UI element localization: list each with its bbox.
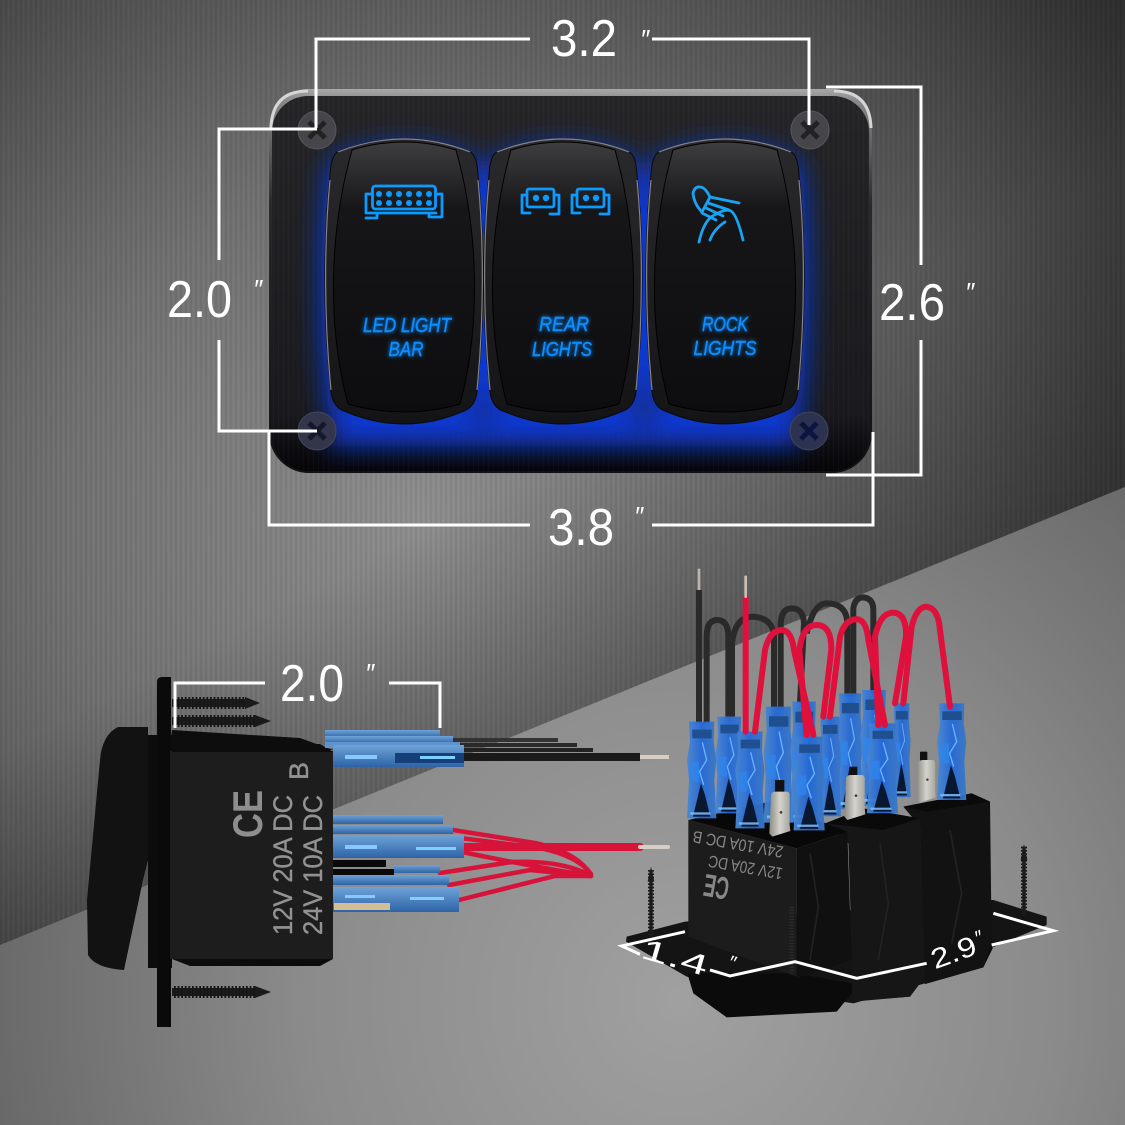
dimension: 2.9 inch: 2.9	[926, 930, 981, 975]
flange and base	[148, 677, 172, 1027]
label: ROCK LIGHTS	[694, 314, 757, 360]
icon: rock light	[693, 187, 743, 242]
red wires and loops	[746, 577, 950, 735]
blue terminals lower	[333, 865, 459, 912]
panel silver edge	[269, 89, 872, 473]
body second switch	[827, 810, 925, 1002]
dimension: panel width 3.8 inch: ″	[634, 501, 644, 531]
dimension: 2.9 inch	[926, 927, 987, 975]
back row blue connectors	[764, 690, 966, 823]
screw: bottom right	[790, 412, 828, 450]
dimension: panel height 2.6 inch	[826, 87, 975, 475]
icon: two rear work lights	[522, 189, 609, 214]
red wires	[440, 830, 668, 900]
dimension: 1.4 inch: 1.4	[637, 933, 712, 983]
body markings: 12V 20A DC	[268, 795, 298, 935]
label: REAR LIGHTS	[532, 314, 593, 361]
front blue connectors	[687, 717, 898, 830]
rocker: rock lights	[646, 139, 804, 424]
mounting screws	[172, 697, 271, 998]
dimension: panel screw width 3.2 inch	[316, 10, 809, 128]
icon: LED light bar	[366, 186, 442, 218]
screw: top right	[791, 111, 829, 149]
black wires upper	[440, 740, 669, 757]
dimension: 1.4 inch: ″	[726, 952, 739, 975]
switch body	[170, 751, 333, 959]
rocker caps underneath	[687, 937, 993, 1017]
front face markings upside down: 12V 20A DC	[707, 851, 784, 883]
screw: bottom left	[298, 412, 336, 450]
dimension: panel height 2.6 inch: 2.6	[879, 274, 945, 332]
label: REAR LIGHTS: LIGHTS	[532, 339, 593, 361]
dimension: panel screw width 3.2 inch: ″	[640, 24, 650, 54]
mounting plate	[626, 900, 1047, 1003]
black wire loops	[699, 569, 873, 723]
dimension: panel width 3.8 inch: 3.8	[548, 499, 614, 557]
label: LED LIGHT BAR: BAR	[388, 339, 424, 361]
rocker: rear lights	[484, 139, 642, 424]
front face markings upside down: CE	[701, 867, 732, 907]
body third switch	[903, 793, 992, 984]
label: ROCK LIGHTS: ROCK	[702, 314, 749, 336]
dimension: panel screw height 2.0 inch: ″	[253, 274, 263, 304]
screw: top left	[298, 111, 336, 149]
front face markings upside down: 24V 10A DC B	[691, 827, 785, 861]
label: ROCK LIGHTS: LIGHTS	[694, 338, 757, 360]
side view of switch	[87, 677, 669, 1027]
front face markings upside down	[691, 827, 785, 907]
rear three-quarter view of switches	[622, 569, 1053, 1017]
spade terminals front	[769, 767, 865, 837]
plate screws	[648, 844, 1027, 937]
rocker: LED light bar	[325, 139, 483, 424]
body markings: B	[284, 762, 314, 780]
body markings: CE	[224, 790, 271, 838]
dimension: panel screw height 2.0 inch	[167, 129, 317, 431]
blue backlight glow	[325, 149, 804, 446]
body markings	[224, 762, 328, 935]
dimension: switch depth 2.0 inch: 2.0	[280, 655, 344, 713]
black terminal strips	[333, 860, 394, 878]
dimension lines on rear view	[622, 913, 1053, 978]
rocker cap side	[87, 727, 148, 970]
spade terminal third	[917, 752, 936, 803]
label: LED LIGHT BAR	[363, 315, 453, 361]
blue terminals middle	[333, 815, 464, 858]
background: light lower area	[0, 487, 1125, 1125]
dimension: switch depth 2.0 inch	[175, 655, 440, 728]
label: REAR LIGHTS: REAR	[539, 314, 589, 336]
dimension: panel height 2.6 inch: ″	[965, 277, 975, 307]
dimension: switch depth 2.0 inch: ″	[365, 658, 375, 688]
panel plate	[272, 96, 869, 471]
dimension: panel screw height 2.0 inch: 2.0	[167, 271, 232, 329]
panel: three-switch rocker panel	[269, 89, 872, 473]
dimension: 2.9 inch: ″	[973, 927, 987, 950]
dimension: 1.4 inch	[637, 933, 739, 983]
blue terminals upper	[325, 730, 464, 767]
front switch body	[688, 793, 990, 978]
label: LED LIGHT BAR: LED LIGHT	[363, 315, 453, 337]
dimension: panel screw width 3.2 inch: 3.2	[551, 10, 617, 68]
body markings: 24V 10A DC	[298, 795, 328, 935]
dimension: panel width 3.8 inch	[269, 432, 873, 557]
